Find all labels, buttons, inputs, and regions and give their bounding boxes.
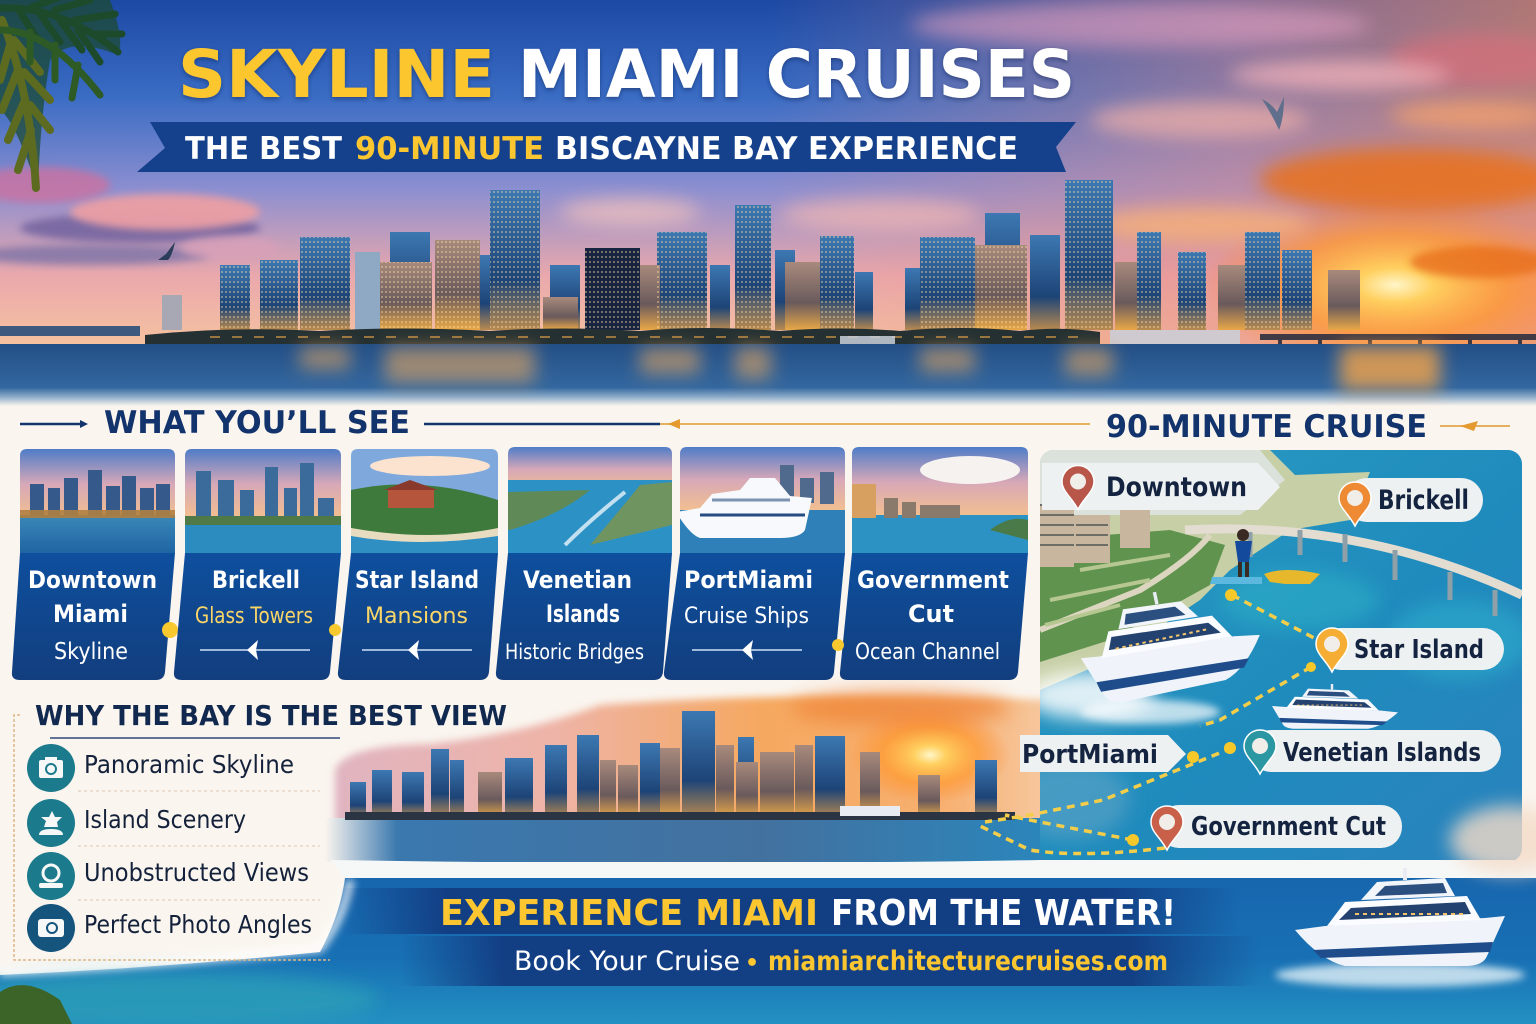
- label: Venetian Islands: [1244, 730, 1501, 774]
- card: Venetian Islands: Islands: [546, 600, 620, 628]
- card: Government Cut: Ocean Channel: [855, 640, 1000, 665]
- card: Downtown Miami: [12, 449, 178, 680]
- route line: [980, 595, 1318, 854]
- label: Downtown: Downtown: [1106, 472, 1247, 503]
- title: [178, 36, 1075, 113]
- card: Venetian Islands: [496, 447, 672, 680]
- card: Downtown Miami: Downtown: [28, 566, 157, 594]
- item: island scenery: [27, 799, 246, 847]
- card: Brickell: [174, 449, 341, 680]
- label: Government Cut: Government Cut: [1191, 812, 1386, 842]
- lower panel background: [0, 395, 1536, 1024]
- card: Star Island: [338, 449, 498, 680]
- background sky: [0, 0, 1536, 370]
- panel: bottom sea: [0, 878, 1536, 1024]
- call to action banner: •: [745, 951, 759, 976]
- label: Star Island: Star Island: [1354, 635, 1484, 665]
- card: Government Cut: Government: [857, 566, 1009, 594]
- icon: bottom yacht: [1275, 868, 1525, 987]
- call to action banner: miamiarchitecturecruises.com: [768, 946, 1168, 977]
- card: Brickell: Brickell: [212, 566, 300, 594]
- label: Star Island: [1316, 628, 1504, 672]
- label: PortMiami: PortMiami: [1022, 740, 1158, 770]
- panel: why the bay: [14, 699, 507, 960]
- call to action banner: EXPERIENCE MIAMI: [440, 893, 818, 934]
- card: Government Cut: Cut: [908, 600, 954, 628]
- card: PortMiami: Cruise Ships: [684, 604, 809, 629]
- heading: what you'll see: [20, 405, 1090, 441]
- icon: gulls: [158, 97, 1284, 260]
- subtitle ribbon: BISCAYNE BAY EXPERIENCE: [555, 131, 1018, 167]
- label: Government Cut: [1151, 805, 1402, 850]
- item: unobstructed views: Unobstructed Views: [84, 858, 309, 887]
- card: Venetian Islands: Venetian: [523, 566, 632, 594]
- card: Brickell: Glass Towers: [195, 604, 313, 629]
- label: Brickell: [1339, 478, 1483, 526]
- icon: jet boats: [1264, 570, 1320, 584]
- icon: large yacht: [1071, 572, 1268, 709]
- card: Star Island: Mansions: [365, 604, 468, 629]
- card: Downtown Miami: Miami: [53, 600, 128, 628]
- heading: what you'll see: WHAT YOU’LL SEE: [104, 405, 410, 441]
- subtitle ribbon: THE BEST: [185, 131, 342, 167]
- card: Downtown Miami: Skyline: [54, 639, 128, 665]
- card: Government Cut: [832, 447, 1028, 680]
- white wave: [330, 806, 1536, 878]
- card: PortMiami: [664, 447, 845, 680]
- call to action banner: Book Your Cruise: [514, 946, 740, 977]
- route map panel: [980, 450, 1530, 862]
- item: perfect photo angles: [27, 904, 312, 952]
- label: Venetian Islands: Venetian Islands: [1283, 738, 1481, 768]
- label: Downtown: [1042, 463, 1280, 510]
- item: panoramic skyline: [27, 744, 294, 792]
- main skyline: [0, 180, 1536, 358]
- item: island scenery: Island Scenery: [84, 805, 246, 834]
- heading: 90-minute cruise: 90-MINUTE CRUISE: [1106, 409, 1427, 445]
- card: Star Island: Star Island: [355, 566, 479, 594]
- card: PortMiami: PortMiami: [684, 566, 813, 594]
- call to action banner: [340, 888, 1260, 986]
- title: MIAMI CRUISES: [518, 36, 1075, 113]
- card: Venetian Islands: Historic Bridges: [505, 640, 644, 664]
- title: SKYLINE: [178, 36, 495, 113]
- item: unobstructed views: [27, 852, 309, 900]
- icon: person: [1210, 529, 1262, 584]
- label: Brickell: Brickell: [1378, 485, 1469, 516]
- subtitle ribbon: [137, 122, 1076, 172]
- panel: why the bay: WHY THE BAY IS THE BEST VIEW: [35, 699, 507, 732]
- item: panoramic skyline: Panoramic Skyline: [84, 750, 294, 779]
- icon: small yacht: [1272, 684, 1398, 729]
- palm fronds: [0, 0, 122, 190]
- item: perfect photo angles: Perfect Photo Angles: [84, 910, 312, 939]
- subtitle ribbon: 90-MINUTE: [355, 131, 544, 167]
- panel: sunset skyline: [325, 690, 1050, 862]
- call to action banner: FROM THE WATER!: [831, 893, 1176, 934]
- water: [0, 344, 1536, 406]
